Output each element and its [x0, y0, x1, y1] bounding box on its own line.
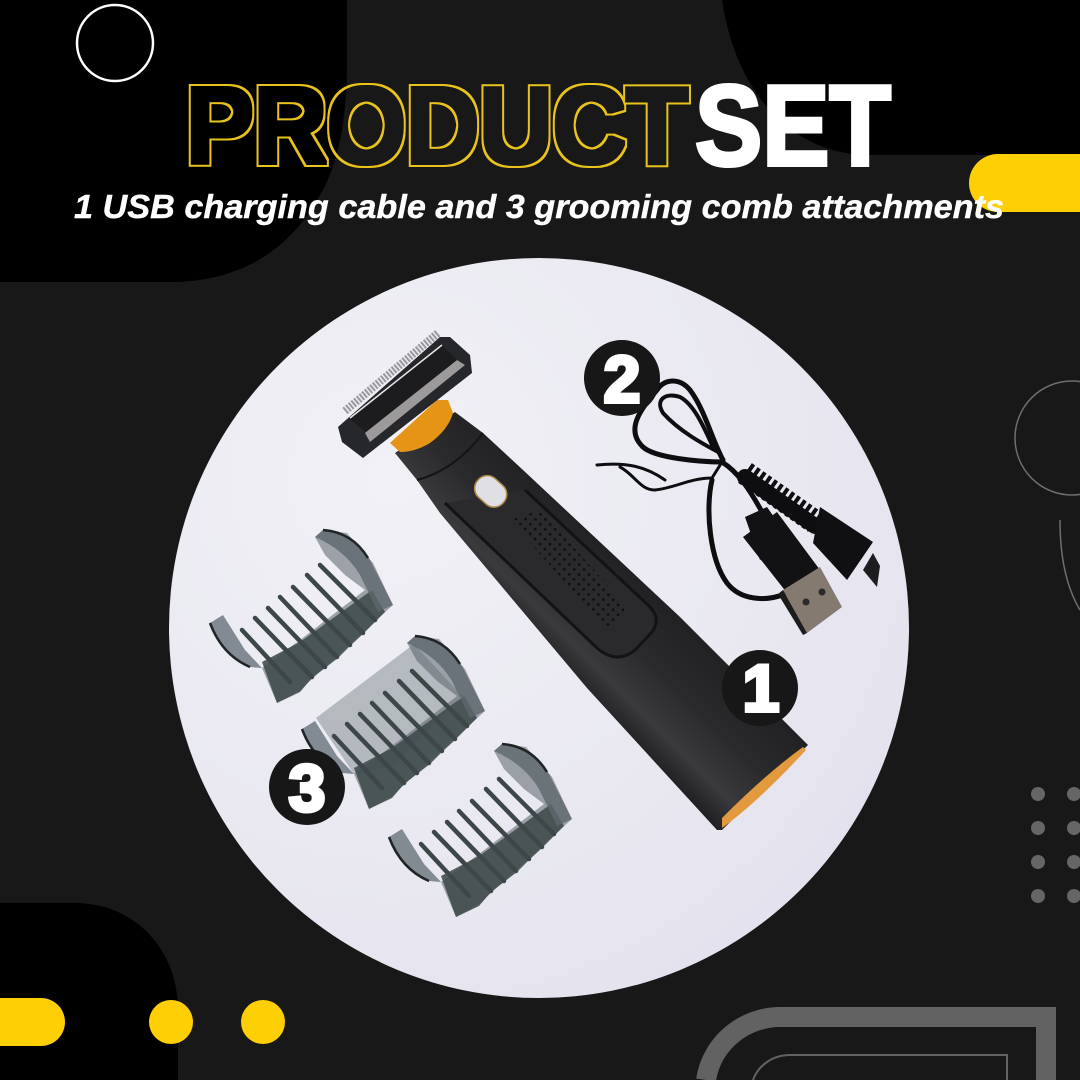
yellow pill: top right [969, 154, 1080, 212]
dot grid: right [1031, 787, 1080, 903]
right arc outline [1060, 520, 1080, 610]
subtitle: 1 USB charging cable and 3 grooming comb attachments [74, 188, 1004, 225]
blade centre [350, 345, 457, 432]
yellow dot 1 [149, 1000, 193, 1044]
white product disc [169, 258, 909, 998]
number badge 1 [722, 650, 798, 726]
shaver head [338, 337, 472, 458]
title word: SET solid: SET [695, 63, 891, 190]
number badge 2: 2 [604, 342, 640, 416]
comb attachments [210, 530, 572, 917]
trimmer [338, 333, 808, 830]
yellow pill: bottom left [0, 998, 65, 1046]
blade lower strip [365, 360, 465, 442]
decorative black blob: top right [722, 0, 1080, 155]
comb 3 [389, 744, 572, 917]
grip dots [510, 510, 630, 630]
decorative black blob: top left [0, 0, 347, 282]
yellow dot 2 [241, 1000, 285, 1044]
right circle outline [1015, 381, 1080, 495]
grey frame: bottom right [706, 1017, 1046, 1080]
decorative circle outline: top left [77, 5, 153, 81]
title word: PRODUCT outlined: PRODUCT [186, 65, 688, 187]
decorative black blob: bottom left [0, 903, 178, 1080]
trimmer grip panel [445, 490, 656, 657]
trimmer base cap [722, 747, 806, 828]
charging cable [597, 381, 815, 599]
blade highlight line [350, 345, 442, 418]
trimmer handle [395, 412, 808, 830]
neck seam [417, 433, 483, 480]
title [186, 63, 891, 190]
power button [470, 471, 512, 512]
comb 1 [210, 530, 393, 703]
blade upper teeth [345, 333, 438, 411]
number badge 2 [584, 340, 660, 416]
comb 2 [302, 636, 485, 809]
number badge 3 [269, 749, 345, 825]
number badge 1: 1 [743, 651, 779, 725]
orange collar [390, 400, 453, 452]
number badge 3: 3 [289, 751, 325, 825]
cable connector and USB plug [743, 507, 880, 635]
